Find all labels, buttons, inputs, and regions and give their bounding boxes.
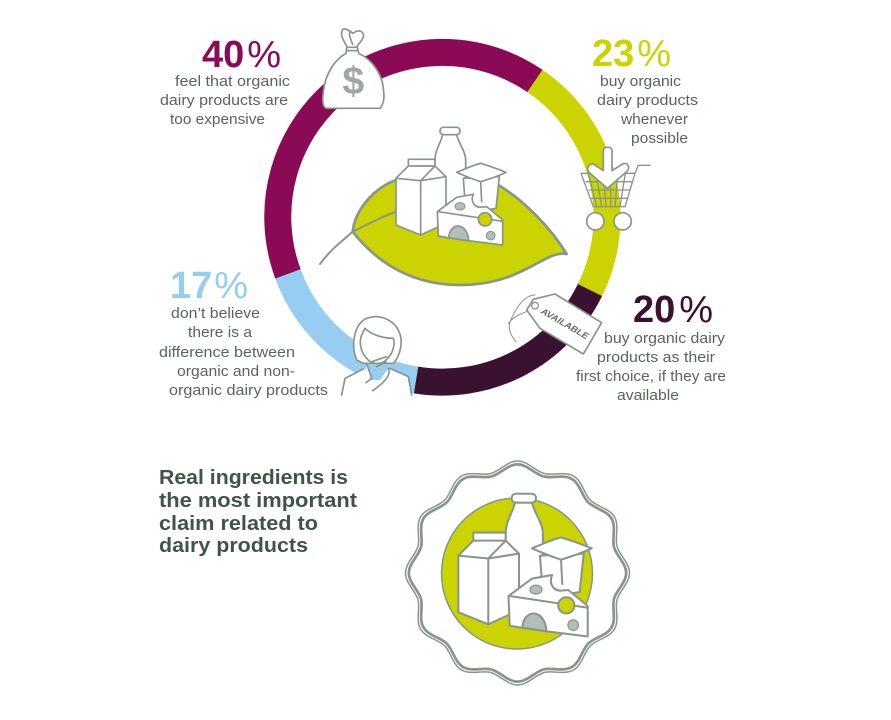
- hand: [366, 357, 389, 391]
- stat: 17%: 17%: [170, 265, 248, 307]
- wheels: [587, 213, 604, 230]
- icon: leaf with dairy products: [320, 127, 567, 285]
- stat: 23%: whenever: [620, 111, 688, 128]
- hair: [354, 317, 401, 363]
- stat: 17%: there is a: [188, 324, 253, 341]
- stat: 20%: buy organic dairy: [604, 330, 726, 347]
- icon: money bag: [323, 29, 384, 108]
- stat: 20%: products as their: [597, 349, 715, 366]
- heading: real ingredients claim: [159, 467, 357, 557]
- stat: 40%: [160, 34, 291, 128]
- stat: 20%: 20%: [633, 289, 713, 331]
- heading: real ingredients claim: Real ingredients is: [159, 467, 348, 489]
- stat: 23%: possible: [631, 130, 688, 147]
- stat: 40%: dairy products are: [160, 92, 288, 109]
- arrow: [588, 147, 629, 188]
- face: [360, 328, 394, 363]
- stat: 23%: dairy products: [597, 92, 698, 109]
- segment: 40% expensive: [278, 52, 535, 274]
- segment: 23% whenever possible: [535, 81, 607, 290]
- stat: 23%: [592, 33, 698, 147]
- heading: real ingredients claim: the most important: [159, 490, 357, 512]
- segment: 20% first choice: [416, 290, 590, 382]
- basket: [581, 165, 650, 207]
- stat: 40%: 40%: [202, 34, 281, 76]
- heading: real ingredients claim: dairy products: [159, 535, 308, 557]
- icon: thinking person: [342, 317, 412, 395]
- stat: 17%: organic dairy products: [169, 382, 328, 399]
- stat: 17%: organic and non-: [177, 363, 295, 380]
- wavy seal border: [406, 461, 630, 685]
- stat: 17%: difference between: [159, 344, 295, 361]
- heading: real ingredients claim: claim related to: [159, 513, 318, 535]
- dollar sign: $: [342, 59, 364, 103]
- icon: shopping cart with arrow: [581, 147, 650, 230]
- stat: 17%: [159, 265, 328, 399]
- lime circle: [442, 498, 592, 649]
- body outline: [342, 368, 412, 395]
- stat: 20%: first choice, if they are: [576, 368, 726, 385]
- stat: 40%: too expensive: [170, 111, 265, 128]
- segment: 17% no difference: [288, 274, 416, 380]
- stat: 17%: don’t believe: [171, 305, 260, 322]
- stat: 20%: [576, 289, 726, 404]
- badge: wavy seal with dairy products: [406, 461, 630, 685]
- tag label: AVAILABLE: [538, 305, 591, 342]
- dairy products: [458, 494, 592, 636]
- stat: 20%: available: [617, 387, 679, 404]
- stat: 40%: feel that organic: [175, 73, 291, 90]
- stat: 23%: 23%: [592, 33, 671, 75]
- stat: 23%: buy organic: [600, 73, 682, 90]
- body fill: [342, 368, 412, 395]
- donut ring chart: [278, 52, 607, 382]
- dairy products: [396, 127, 506, 245]
- icon: available tag: [508, 294, 602, 354]
- leaf: [320, 180, 567, 285]
